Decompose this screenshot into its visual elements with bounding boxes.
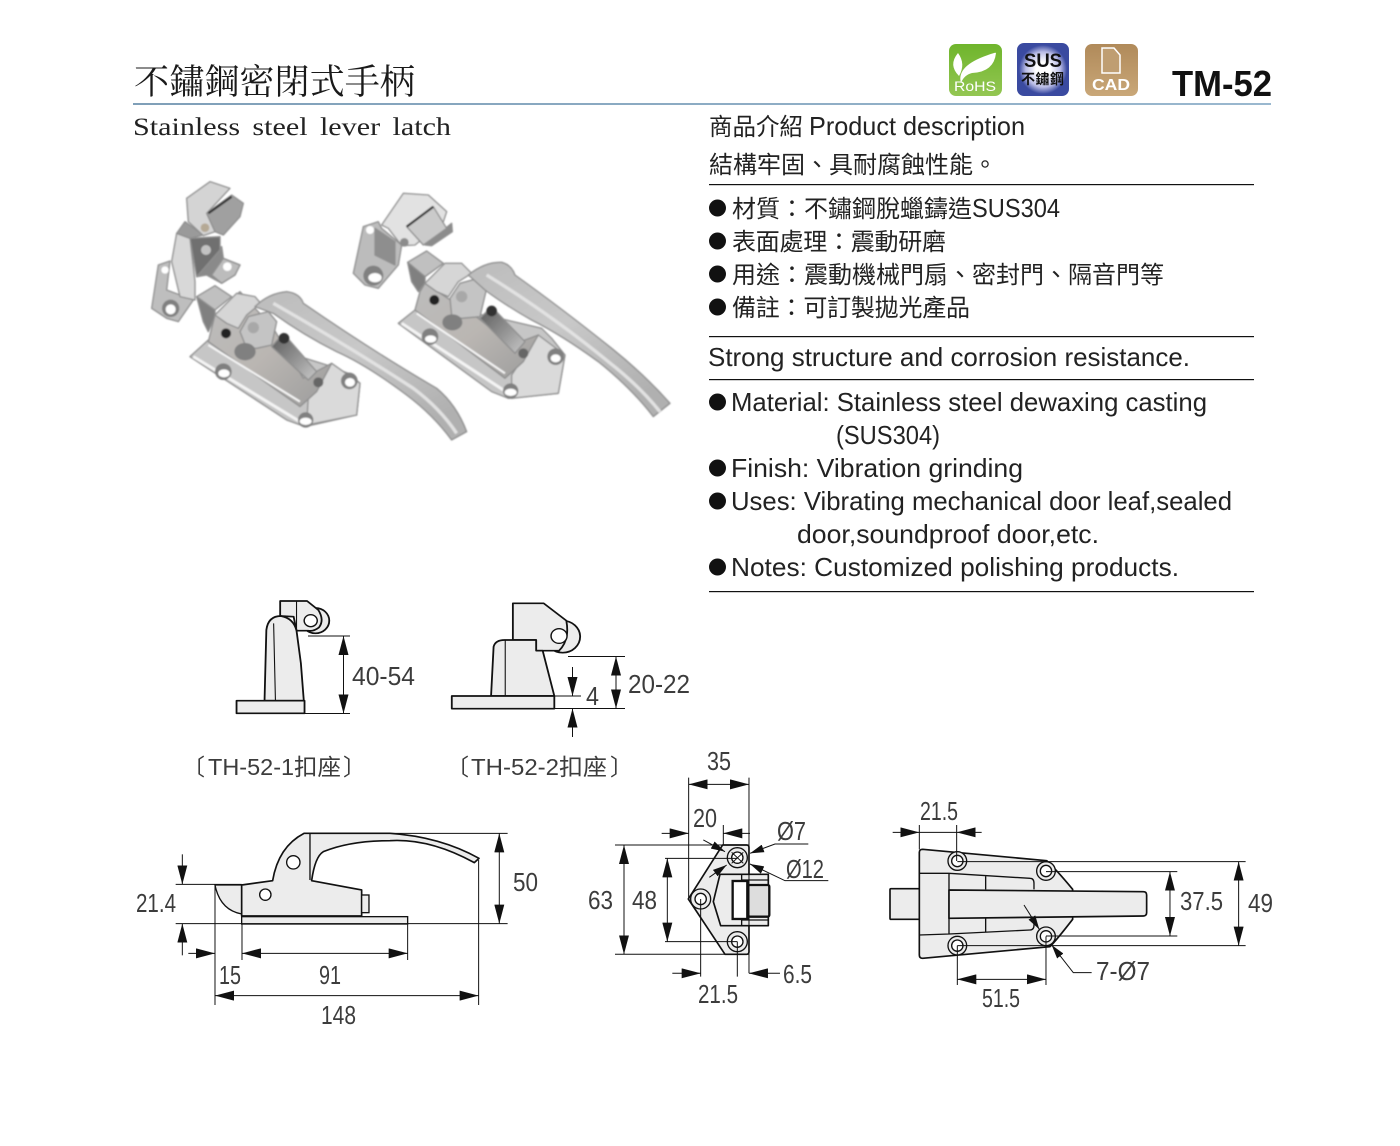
diagram: catch end view with dimensions: 20 — [693, 803, 717, 833]
diagram: top view with dimensions: 37.5 — [1180, 886, 1223, 916]
list: English specifications: door,soundproof door,etc. — [797, 519, 1099, 549]
list: Chinese specifications: 材質：不鏽鋼脫蠟鑄造 — [732, 189, 972, 224]
diagram: top view with dimensions: 7-Ø7 — [1096, 956, 1150, 986]
label: TH-52-2: 〔 — [446, 754, 469, 780]
diagram: top view with dimensions — [890, 796, 1273, 1013]
diagram: catch end view with dimensions — [588, 746, 828, 1009]
diagram: side view with dimensions: 148 — [321, 1000, 356, 1030]
diagram: TH-52-2 catch: 4 — [586, 681, 599, 711]
diagram: top view with dimensions: 21.5 — [920, 796, 958, 826]
diagram: side view with dimensions: 15 — [219, 960, 241, 990]
icon: SUS stainless badge: 不鏽鋼 — [1021, 69, 1064, 89]
right latch bracket — [353, 193, 452, 288]
diagram: TH-52-1 catch — [237, 601, 415, 714]
model number: TM-52 — [1172, 63, 1272, 104]
label: TH-52-2: TH-52-2扣座 — [471, 754, 607, 780]
diagram: catch end view with dimensions: Ø7 — [777, 816, 806, 846]
diagram: TH-52-2 catch: 20-22 — [628, 669, 690, 699]
label: TH-52-1: 〕 — [343, 754, 366, 780]
right latch handle — [468, 262, 670, 417]
left latch bracket — [152, 182, 243, 322]
left latch body — [190, 286, 360, 428]
diagram: TH-52-2 catch — [452, 603, 690, 737]
list: English specifications: Material: Stainless steel dewaxing casting — [731, 387, 1207, 417]
left latch handle — [255, 292, 467, 440]
label: TH-52-1: TH-52-1扣座 — [208, 754, 341, 780]
list: English specifications: Notes: Customized polishing products. — [731, 552, 1179, 582]
text: Chinese summary: 結構牢固、具耐腐蝕性能。 — [709, 145, 997, 180]
list: Chinese specifications: SUS304 — [972, 193, 1060, 223]
list: Chinese specifications: 表面處理：震動研磨 — [732, 222, 946, 257]
list: English specifications: Uses: Vibrating mechanical door leaf,sealed — [731, 486, 1232, 516]
title: 不鏽鋼密閉式手柄 — [134, 55, 415, 105]
list: Chinese specifications: 用途：震動機械門扇、密封門、隔音門等 — [732, 255, 1164, 290]
diagram: catch end view with dimensions: 48 — [632, 885, 657, 915]
label: TH-52-2 — [446, 754, 633, 780]
icon: SUS stainless badge: SUS — [1024, 51, 1062, 72]
panel: product description heading — [709, 107, 1025, 142]
diagram: top view with dimensions: 51.5 — [982, 983, 1020, 1013]
header rule — [133, 103, 1271, 105]
diagram: catch end view with dimensions: 35 — [707, 746, 731, 776]
icon: CAD badge — [1085, 44, 1138, 96]
divider rules — [709, 184, 1254, 592]
list: Chinese specifications: 備註：可訂製拋光產品 — [732, 288, 970, 323]
panel: product photo — [152, 182, 670, 440]
diagram: top view with dimensions: 49 — [1248, 888, 1273, 918]
diagram: side view with dimensions: 50 — [513, 867, 538, 897]
panel: product description heading: Product description — [809, 111, 1025, 141]
icon: CAD badge: CAD — [1092, 77, 1130, 94]
label: TH-52-1: 〔 — [182, 754, 205, 780]
icon: SUS stainless badge — [1017, 43, 1069, 96]
icon: RoHS badge: RoHS — [954, 78, 996, 94]
list: English specifications: (SUS304) — [836, 420, 940, 450]
diagram: catch end view with dimensions: 63 — [588, 885, 613, 915]
list: Chinese specifications — [709, 189, 1164, 323]
diagram: catch end view with dimensions: 6.5 — [783, 959, 812, 989]
diagram: TH-52-1 catch: 40-54 — [352, 661, 415, 691]
diagram: catch end view with dimensions: Ø12 — [786, 854, 824, 884]
panel: product description heading: 商品介紹 — [709, 107, 803, 142]
list: English specifications: Finish: Vibration grinding — [731, 453, 1023, 483]
list: English specifications — [709, 387, 1232, 582]
diagram: catch end view with dimensions: 21.5 — [698, 979, 738, 1009]
diagram: side view with dimensions: 91 — [319, 960, 341, 990]
diagram: side view with dimensions — [136, 833, 538, 1030]
diagram: side view with dimensions: 21.4 — [136, 888, 176, 918]
icon: RoHS badge — [949, 44, 1002, 96]
text: English summary: Strong structure and corrosion resistance. — [708, 342, 1190, 372]
label: TH-52-2: 〕 — [610, 754, 633, 780]
right latch body — [398, 251, 565, 399]
subtitle: Stainless steel lever latch — [133, 114, 452, 141]
